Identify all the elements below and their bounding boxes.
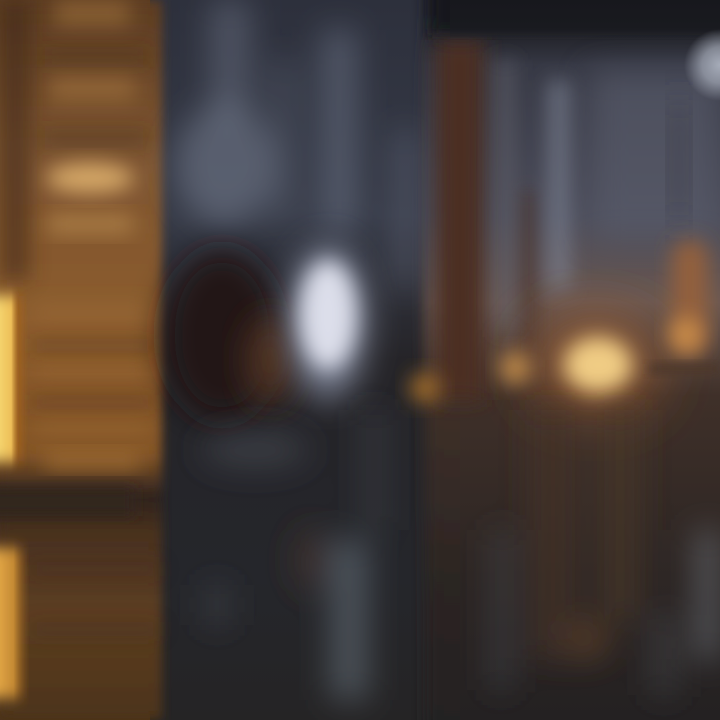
smoky grey upper centre [175,0,417,290]
white glowing oval [288,244,368,400]
bright window glow upper left [0,296,28,461]
lower centre reflections [200,410,386,700]
dark figure [164,250,294,420]
floor reflections on the right [492,410,720,695]
dark ledge [0,488,145,516]
brick wall on the left [0,0,162,720]
warm lights on the right [500,240,720,413]
grey columns and second pillar [496,60,570,360]
brown column [410,40,484,403]
bright window glow lower left [0,548,30,698]
dark ceiling band [432,0,720,40]
pale arch on the upper right [590,29,720,240]
